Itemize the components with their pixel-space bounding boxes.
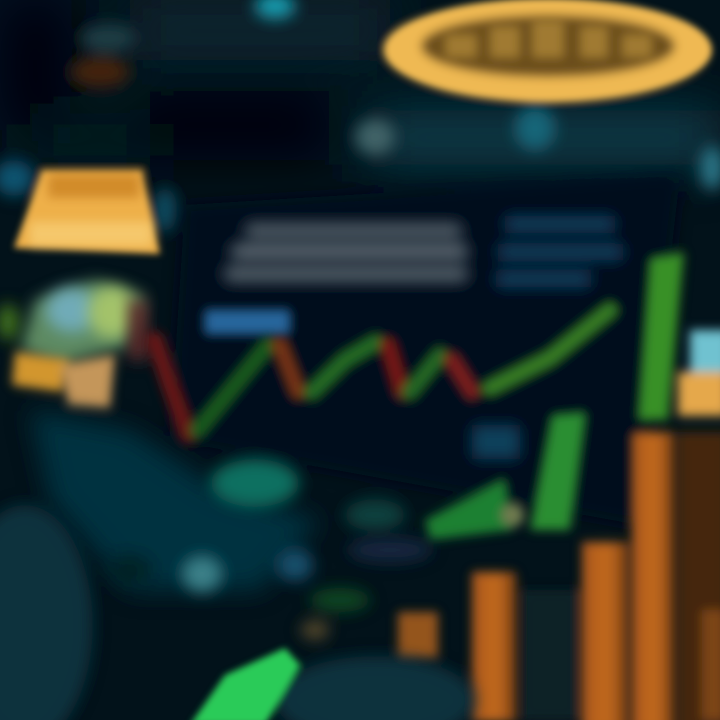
background glow: upper teal haze (0, 0, 720, 165)
blurred panel heading (225, 224, 467, 281)
teal wave shapes, lower left (0, 410, 475, 720)
line chart: red and green zigzag (155, 310, 610, 435)
blurred blue side text (496, 216, 623, 287)
tall green candle on the right (638, 252, 684, 420)
bright green blob, bottom (190, 648, 300, 720)
gold block on the left (14, 170, 160, 254)
gold oval emblem (384, 0, 712, 102)
colourful cluster at the left (0, 280, 148, 408)
small lights and dark details, bottom centre (108, 538, 432, 639)
blurred blue label (205, 310, 290, 334)
central dark chart panel (155, 175, 680, 525)
right edge gold and cyan block (678, 330, 720, 416)
green rising chart, lower panel (425, 412, 586, 540)
small glowing lights at the top (0, 0, 720, 232)
blurred blue label, lower panel (472, 425, 520, 459)
orange bars, lower right (398, 432, 720, 720)
